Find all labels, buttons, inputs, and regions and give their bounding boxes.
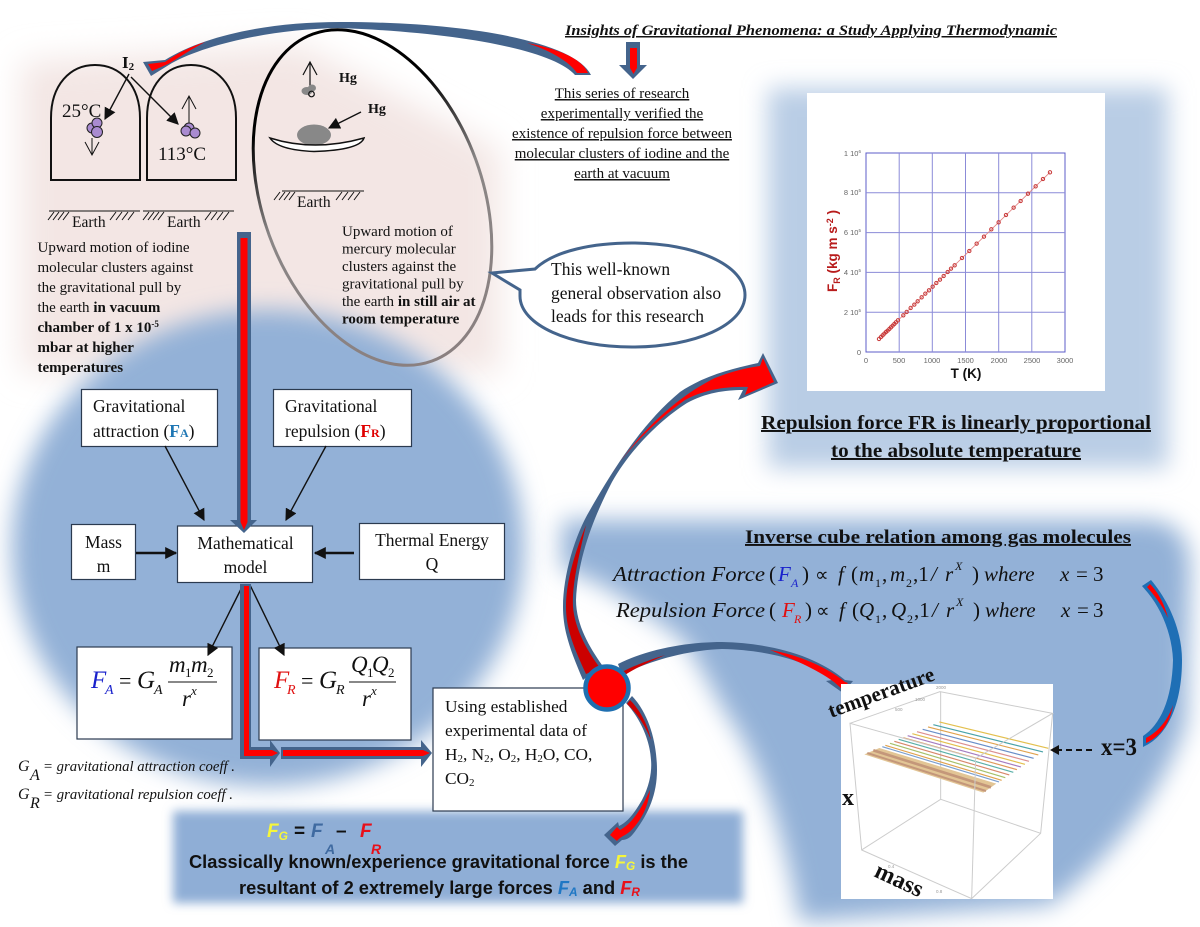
y axis title: F	[825, 284, 840, 292]
attraction force relation: A	[790, 576, 799, 590]
x tick labels: 1500	[957, 356, 974, 365]
iodine cluster falling	[85, 118, 102, 155]
arrow: vertical to model	[230, 232, 257, 533]
repulsion force relation: r	[946, 598, 955, 622]
repulsion force relation: /	[931, 598, 940, 622]
attraction force relation: f	[838, 562, 847, 586]
earth	[274, 191, 364, 211]
attraction force relation: ,	[882, 562, 887, 586]
y tick labels	[844, 149, 861, 357]
box: gravitational repulsion	[274, 390, 412, 446]
plot front edges	[850, 692, 1053, 899]
label 25C: 25°C	[62, 101, 101, 122]
equation	[267, 821, 382, 857]
mercury description: room temperature	[342, 312, 460, 328]
x tick labels	[864, 356, 1073, 365]
box: attraction formula: x	[190, 683, 197, 698]
chamber right	[147, 65, 236, 180]
iodine description: the earth in vacuum	[38, 300, 160, 316]
arrow: x=3 to relations	[1142, 580, 1182, 747]
box: repulsion formula: R	[286, 683, 296, 698]
box: gravitational attraction: attraction (FA)	[93, 421, 194, 441]
callout	[492, 243, 745, 347]
coefficient legend: = gravitational repulsion coeff .	[43, 787, 233, 803]
label x equals 3: x=3	[1101, 734, 1137, 761]
label I2: 2	[129, 61, 135, 73]
axis tick labels: 2000	[936, 685, 947, 690]
box: thermal energy: Q	[426, 554, 439, 574]
attraction force relation: r	[945, 562, 954, 586]
label Hg top: Hg	[339, 71, 357, 86]
y tick labels: 5	[858, 308, 861, 313]
repulsion force relation: (	[769, 598, 776, 622]
y tick labels: 4 10	[844, 268, 858, 277]
arrow: model down to data box	[240, 584, 432, 767]
inverse cube heading: Inverse cube relation among gas molecules	[745, 527, 1131, 548]
description: Classically known/experience gravitational force F	[189, 851, 626, 872]
pointer lines	[105, 74, 178, 124]
summary text	[512, 86, 732, 182]
repulsion force relation: Q	[859, 598, 874, 622]
mercury droplet rising	[302, 62, 317, 97]
box: attraction formula: 1	[185, 665, 192, 680]
chart panel	[807, 93, 1105, 391]
coefficient legend: R	[29, 795, 40, 812]
equation: G	[279, 829, 288, 843]
attraction force relation: /	[930, 562, 939, 586]
iodine description: the gravitational pull by	[38, 280, 182, 296]
axis tick labels: 1000	[915, 697, 926, 702]
box: repulsion formula: 1	[367, 665, 374, 680]
iodine description: molecular clusters against	[38, 260, 194, 276]
y tick labels: 2 10	[844, 308, 858, 317]
earth: Earth	[297, 194, 331, 211]
data series	[877, 171, 1052, 341]
arrow: node to chart	[563, 353, 778, 680]
repulsion force relation: ,	[882, 598, 887, 622]
box: repulsion formula: r	[362, 686, 372, 711]
y axis title: (kg m s	[825, 226, 840, 277]
repulsion force relation: )	[805, 598, 812, 622]
label I2: I	[122, 53, 129, 72]
y axis title: )	[825, 210, 840, 218]
y tick labels: 6 10	[844, 228, 858, 237]
iodine cluster rising	[181, 96, 200, 138]
attraction force relation: ,1	[913, 562, 929, 586]
y tick labels: 5	[858, 228, 861, 233]
y tick labels: 5	[858, 188, 861, 193]
box: repulsion formula: =	[301, 668, 313, 693]
description: is the	[635, 851, 688, 872]
arrow: title to summary	[619, 42, 647, 79]
box: repulsion formula: 2	[388, 665, 394, 680]
y tick labels: 5	[858, 268, 861, 273]
repulsion force relation: 1	[875, 612, 881, 626]
y tick labels: 1 10	[844, 149, 858, 158]
chamber left	[51, 65, 140, 180]
x tick labels: 0	[864, 356, 868, 365]
box: mass	[72, 524, 136, 580]
summary text: experimentally verified the	[541, 106, 704, 122]
attraction force relation: m	[859, 562, 874, 586]
x axis title: T (K)	[951, 366, 981, 381]
background: gravitational force banner	[173, 811, 743, 903]
repulsion force relation: 2	[907, 612, 913, 626]
box: mathematical model	[178, 526, 312, 582]
repulsion force relation: ∝	[816, 601, 830, 622]
attraction force relation: where	[984, 562, 1035, 586]
box: attraction formula: A	[104, 683, 114, 698]
box: gravitational attraction	[82, 390, 218, 446]
mercury pool	[297, 124, 331, 146]
equation: F	[311, 821, 324, 842]
coefficient legend: G	[18, 758, 30, 775]
description: F	[620, 877, 640, 899]
repulsion force relation	[615, 595, 1104, 626]
box: repulsion formula: F	[273, 667, 290, 694]
box: mathematical model: Mathematical	[197, 533, 294, 553]
attraction force relation: Attraction Force	[611, 562, 765, 586]
equation: F	[267, 821, 279, 842]
iodine description: chamber of 1 x 10	[38, 319, 159, 336]
chart caption: Repulsion force FR is linearly proportional	[761, 412, 1152, 434]
attraction force relation: =	[1076, 562, 1088, 586]
attraction force relation: ∝	[815, 565, 829, 586]
iodine description: mbar at higher	[38, 340, 134, 356]
label Hg lower: Hg	[368, 102, 386, 117]
coefficient legend: = gravitational attraction coeff .	[43, 759, 235, 775]
earth left	[48, 211, 140, 231]
box: mass: m	[97, 556, 111, 576]
label mass: mass	[870, 858, 927, 903]
repulsion force relation: f	[839, 598, 848, 622]
attraction force relation: 1	[875, 576, 881, 590]
repulsion force relation: Repulsion Force	[615, 598, 765, 622]
box: experimental data: , N	[463, 745, 485, 764]
gravitational force banner text	[189, 821, 688, 899]
y axis title: -2	[825, 218, 835, 226]
y tick labels: 8 10	[844, 188, 858, 197]
box: repulsion formula: R	[335, 683, 345, 698]
box: repulsion formula: G	[319, 667, 337, 694]
box: thermal energy: Thermal Energy	[375, 530, 489, 550]
summary text: molecular clusters of iodine and the	[515, 146, 730, 162]
repulsion force relation: X	[955, 595, 964, 609]
summary text: existence of repulsion force between	[512, 126, 732, 142]
box: attraction formula: A	[153, 683, 163, 698]
equation: R	[371, 841, 382, 857]
earth left: Earth	[72, 214, 106, 231]
box: experimental data: 2	[469, 777, 475, 789]
box: repulsion formula: x	[370, 683, 377, 698]
panel: mercury ellipse	[210, 0, 535, 399]
mercury description: Upward motion of	[342, 224, 453, 240]
box: experimental data: , O	[490, 745, 511, 764]
box: attraction formula: G	[137, 667, 155, 694]
mercury description: the earth in still air at	[342, 294, 475, 310]
grid	[866, 153, 1065, 352]
arrow: dashed to surface	[1050, 745, 1092, 755]
earth right: Earth	[167, 214, 201, 231]
attraction force relation: )	[802, 562, 809, 586]
x tick labels: 2500	[1024, 356, 1040, 365]
description	[189, 851, 688, 899]
mercury description: gravitational pull by	[342, 276, 464, 292]
box: experimental data: O, CO,	[543, 745, 592, 764]
box: experimental data: 2	[484, 753, 490, 765]
axis tick labels: 0.8	[936, 889, 943, 894]
callout: general observation also	[551, 283, 721, 303]
chart caption	[761, 412, 1152, 462]
repulsion force relation: F	[781, 598, 795, 622]
axis tick labels: 500	[895, 707, 903, 712]
x tick labels: 3000	[1057, 356, 1073, 365]
box: experimental data: H	[445, 745, 592, 765]
background: chart panel	[768, 88, 1168, 468]
mercury description: mercury molecular	[342, 242, 456, 258]
attraction force relation: (	[851, 562, 858, 586]
coefficient legend	[18, 758, 235, 812]
box: mathematical model: model	[224, 557, 268, 577]
coefficient legend: A	[29, 767, 40, 784]
panel: iodine chambers	[48, 53, 236, 231]
box: experimental data: Using established	[445, 697, 568, 716]
repulsion force relation: )	[973, 598, 980, 622]
repulsion force relation: Q	[891, 598, 906, 622]
repulsion force relation: 3	[1093, 598, 1104, 622]
attraction force relation: X	[954, 559, 963, 573]
repulsion force relation: ,1	[914, 598, 930, 622]
description: and	[578, 877, 620, 898]
box: repulsion formula: Q	[351, 652, 368, 677]
callout: This well-known	[551, 259, 670, 279]
node circle	[586, 666, 628, 710]
summary text: earth at vacuum	[574, 166, 670, 182]
label 113C: 113°C	[158, 144, 206, 165]
box: thermal energy	[360, 524, 504, 580]
description: R	[631, 885, 640, 899]
box: attraction formula: =	[119, 668, 131, 693]
box: attraction formula: m	[169, 652, 186, 677]
repulsion force relation: =	[1077, 598, 1089, 622]
box: experimental data: 2	[537, 753, 543, 765]
callout: leads for this research	[551, 306, 704, 326]
box: attraction formula	[77, 647, 232, 739]
attraction force relation: (	[769, 562, 776, 586]
box: gravitational attraction: Gravitational	[93, 396, 185, 416]
y tick labels: 0	[857, 348, 861, 357]
box: repulsion formula: Q	[372, 652, 389, 677]
attraction force relation: 3	[1093, 562, 1104, 586]
box: experimental data: , H	[516, 745, 537, 764]
attraction force relation: x	[1059, 562, 1070, 586]
label x axis: x	[842, 785, 854, 811]
box: gravitational repulsion: repulsion (FR)	[285, 421, 386, 441]
background: pink glow	[22, 45, 500, 372]
y axis title: R	[832, 277, 842, 284]
surface plot	[841, 684, 1053, 899]
box: experimental data: experimental data of	[445, 721, 587, 740]
background: blue model region	[12, 310, 524, 786]
equation: =	[294, 821, 305, 842]
box: attraction formula: F	[90, 667, 107, 694]
surface	[864, 722, 1048, 793]
iodine description: -5	[151, 319, 159, 329]
repulsion force relation: x	[1060, 598, 1071, 622]
repulsion force relation: (	[852, 598, 859, 622]
arrow: curved from summary to iodine chambers	[143, 22, 591, 76]
y tick labels: 6	[858, 149, 861, 154]
box: repulsion formula	[259, 648, 411, 740]
equation: F	[360, 821, 373, 842]
background: inverse cube panel	[562, 520, 1190, 922]
plot back edges	[862, 692, 1041, 850]
box: experimental data: 2	[511, 753, 516, 765]
box: attraction formula: r	[182, 686, 192, 711]
arrows model to formulas	[208, 585, 284, 655]
equation: –	[336, 821, 347, 842]
iodine description: temperatures	[38, 360, 123, 376]
x tick labels: 500	[893, 356, 905, 365]
summary text: This series of research	[555, 86, 690, 102]
box: gravitational repulsion: Gravitational	[285, 396, 377, 416]
arrow: node to gravity banner	[604, 696, 657, 846]
x tick labels: 1000	[924, 356, 940, 365]
coefficient legend: G	[18, 786, 30, 803]
axis tick labels: 0.4	[888, 864, 895, 869]
axis tick labels	[888, 685, 947, 894]
attraction force relation: F	[777, 562, 791, 586]
attraction force relation	[611, 559, 1104, 590]
arrow: node to surface plot	[618, 642, 853, 693]
box: attraction formula: m	[191, 652, 208, 677]
dish	[270, 138, 364, 152]
description: A	[568, 885, 578, 899]
x tick labels: 2000	[991, 356, 1007, 365]
equation: A	[324, 841, 335, 857]
box: experimental data: CO	[445, 769, 475, 789]
repulsion force relation: R	[793, 612, 802, 626]
pointer to mercury pool	[329, 112, 361, 128]
repulsion force relation: where	[985, 598, 1036, 622]
mercury diagram	[270, 62, 386, 211]
box: mass: Mass	[85, 532, 122, 552]
label temperature: temperature	[825, 662, 938, 723]
earth right	[143, 211, 234, 231]
attraction force relation: m	[890, 562, 905, 586]
iodine description: Upward motion of iodine	[38, 240, 190, 256]
attraction force relation: )	[972, 562, 979, 586]
box: attraction formula: 2	[207, 665, 214, 680]
box: experimental data	[433, 688, 623, 811]
attraction force relation: 2	[906, 576, 912, 590]
mercury description: clusters against the	[342, 259, 456, 275]
box: experimental data: 2	[457, 753, 463, 765]
chart caption: to the absolute temperature	[831, 440, 1081, 462]
description: G	[626, 859, 635, 873]
description: resultant of 2 extremely large forces F	[239, 877, 569, 898]
arrows into model	[136, 446, 354, 553]
title: Insights of Gravitational Phenomena: a Study Applying Thermodynamic	[564, 23, 1057, 39]
